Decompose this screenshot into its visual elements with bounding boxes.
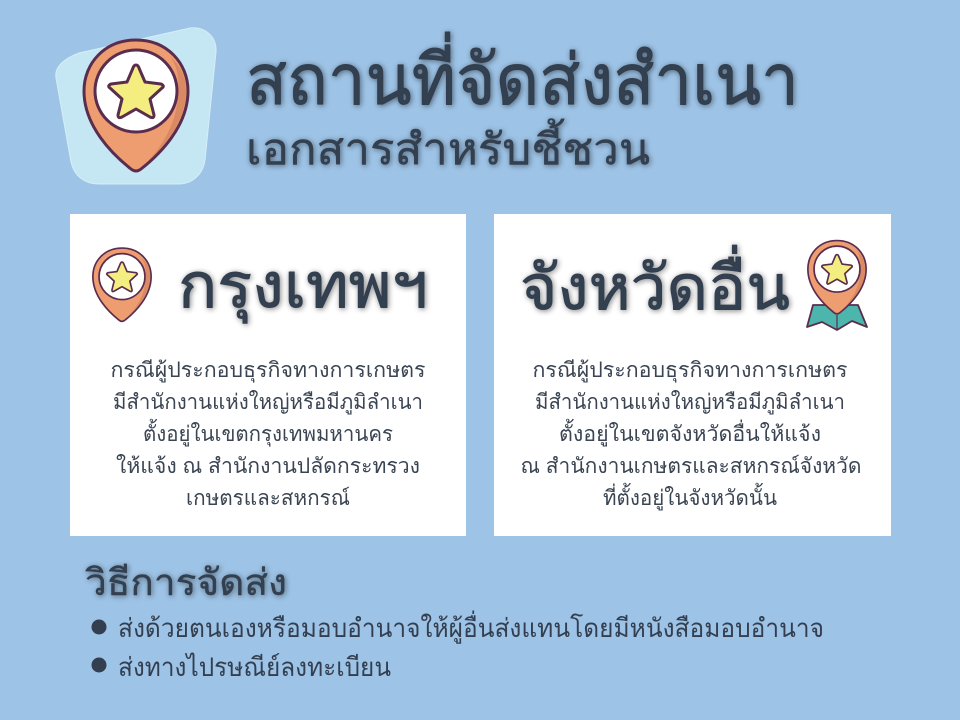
panel text: Bangkok: ตั้งอยู่ในเขตกรุงเทพมหานคร (143, 419, 393, 447)
panel text: other provinces: มีสำนักงานแห่งใหญ่หรือมีภูมิลำเนา (535, 390, 845, 415)
panel: Bangkok (70, 214, 466, 536)
heading: delivery methods: วิธีการจัดส่ง (85, 562, 287, 603)
title: สถานที่จัดส่งสำเนา (246, 32, 799, 119)
panel text: Bangkok: ให้แจ้ง ณ สำนักงานปลัดกระทรวง (116, 454, 420, 478)
panel text: Bangkok: มีสำนักงานแห่งใหญ่หรือมีภูมิลำเนา (113, 390, 423, 415)
icon: header location pin on pale blob (56, 28, 216, 184)
subtitle: เอกสารสำหรับชี้ชวน (246, 118, 650, 174)
list item 2: ส่งทางไปรษณีย์ลงทะเบียน (118, 652, 391, 682)
panel text: other provinces: ตั้งอยู่ในเขตจังหวัดอื่นให้แจ้ง (559, 419, 821, 447)
panel text: Bangkok: กรณีผู้ประกอบธุรกิจทางการเกษตร (110, 359, 426, 383)
panel text: other provinces: ที่ตั้งอยู่ในจังหวัดนั้น (603, 483, 777, 511)
panel text: other provinces (520, 359, 862, 511)
panel text: Bangkok (110, 359, 426, 510)
icon: location pin with ribbon (807, 241, 867, 330)
panel: other provinces (494, 214, 891, 536)
list: delivery methods (92, 610, 824, 682)
list item 1: ส่งด้วยตนเองหรือมอบอำนาจให้ผู้อื่นส่งแทนโดยมีหนังสือมอบอำนาจ (118, 610, 824, 644)
panel text: other provinces: ณ สำนักงานเกษตรและสหกรณ์จังหวัด (520, 454, 862, 478)
panel text: other provinces: กรณีผู้ประกอบธุรกิจทางการเกษตร (532, 359, 848, 383)
panel heading: other provinces: จังหวัดอื่น (520, 245, 790, 323)
icon: location pin (93, 248, 151, 321)
panel heading: Bangkok: กรุงเทพฯ (178, 252, 428, 323)
panel text: Bangkok: เกษตรและสหกรณ์ (186, 486, 350, 510)
